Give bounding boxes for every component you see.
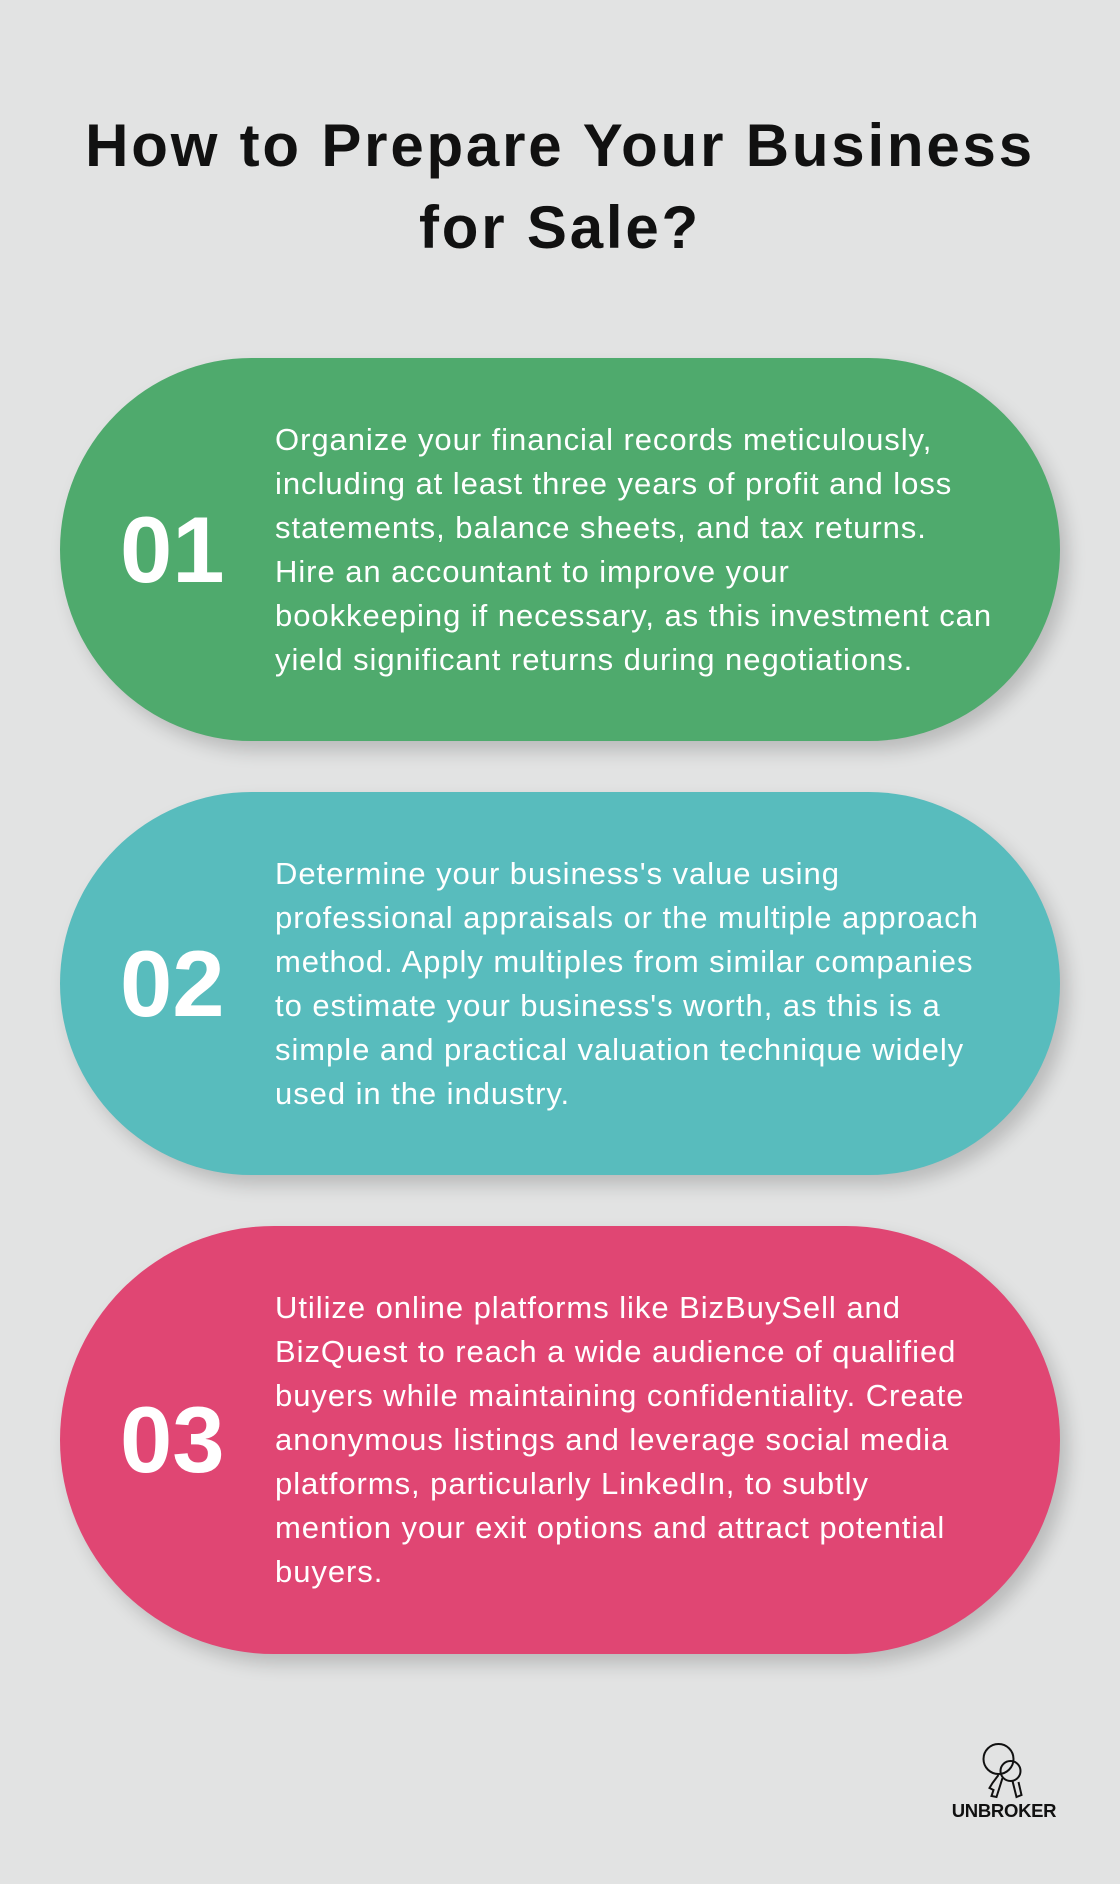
text 02: method. Apply multiples from similar companies [275, 944, 973, 978]
text 03: buyers while maintaining confidentiality. Create [275, 1378, 964, 1413]
title [85, 112, 1035, 261]
text 03: Utilize online platforms like BizBuySell and [275, 1290, 901, 1325]
text 02: used in the industry. [275, 1076, 570, 1110]
text 01: Hire an accountant to improve your [275, 554, 790, 588]
text 03 [275, 1290, 964, 1589]
text 02 [275, 856, 979, 1110]
icon: keys [982, 1743, 1023, 1798]
panel: step 02 [60, 792, 1060, 1175]
text 01: Organize your financial records meticulously, [275, 422, 932, 456]
logo [952, 1743, 1056, 1821]
text 03: buyers. [275, 1554, 383, 1589]
text 03: anonymous listings and leverage social media [275, 1422, 949, 1457]
text 03: mention your exit options and attract potential [275, 1510, 945, 1545]
text 03: BizQuest to reach a wide audience of qualified [275, 1334, 956, 1369]
text 01 [275, 422, 992, 676]
title: for Sale? [419, 194, 701, 261]
number 02: 02 [120, 930, 225, 1036]
text 01: yield significant returns during negotiations. [275, 642, 913, 676]
number 01: 01 [120, 496, 225, 602]
text 02: Determine your business's value using [275, 856, 840, 890]
text 01: including at least three years of profit and loss [275, 466, 952, 500]
panel: step 03 [60, 1226, 1060, 1654]
number 03: 03 [120, 1387, 225, 1492]
text 02: professional appraisals or the multiple approach [275, 900, 979, 934]
panel: step 01 [60, 358, 1060, 741]
text 02: simple and practical valuation technique widely [275, 1032, 964, 1066]
text 03: platforms, particularly LinkedIn, to subtly [275, 1466, 869, 1501]
text 01: statements, balance sheets, and tax returns. [275, 510, 927, 544]
logo text: UNBROKER [952, 1800, 1056, 1821]
title: How to Prepare Your Business [85, 112, 1035, 179]
text 01: bookkeeping if necessary, as this investment can [275, 598, 992, 632]
text 02: to estimate your business's worth, as this is a [275, 988, 941, 1022]
